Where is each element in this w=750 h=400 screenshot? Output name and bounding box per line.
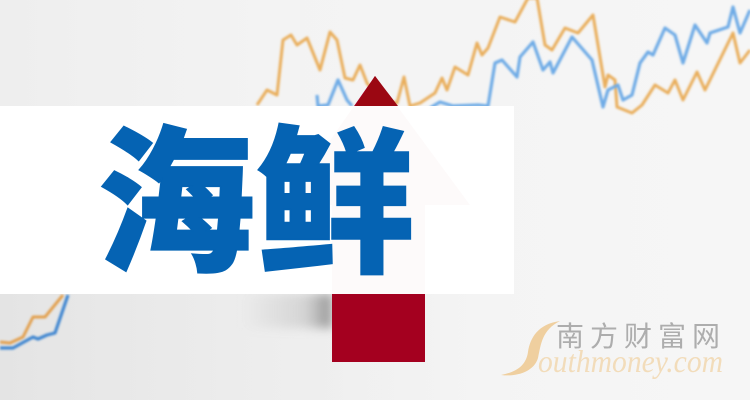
shadow of red arrow xyxy=(240,294,332,328)
watermark URL: outhmoney.com xyxy=(538,343,723,379)
title: 海鲜: 鲜 xyxy=(256,117,414,293)
watermark swoosh S xyxy=(501,321,560,375)
white title panel xyxy=(0,106,514,294)
watermark: southmoney logo xyxy=(501,321,726,379)
title: 海鲜: 海 xyxy=(97,117,255,293)
watermark Chinese name: 南方财富网 xyxy=(556,321,726,352)
red arrow xyxy=(285,76,470,362)
title: 海鲜 xyxy=(97,117,414,293)
